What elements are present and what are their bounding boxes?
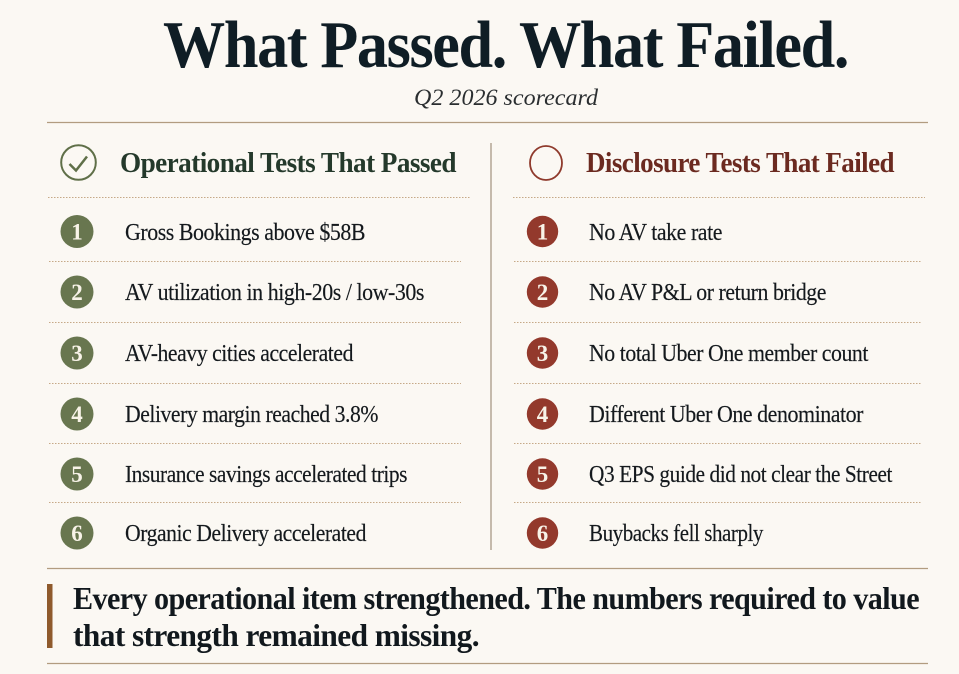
- item 3: No total Uber One member count: [589, 341, 869, 367]
- item 1: No AV take rate: [589, 220, 722, 246]
- callout: that strength remained missing.: [73, 617, 479, 653]
- item 6: 6: [71, 521, 83, 546]
- item 6: Buybacks fell sharply: [589, 521, 763, 547]
- item 1: [527, 216, 722, 247]
- panel: disclosure tests that failed: [513, 146, 925, 549]
- item 1: Gross Bookings above $58B: [125, 220, 365, 246]
- item 2: No AV P&L or return bridge: [589, 280, 826, 306]
- item 2: [527, 276, 826, 308]
- item 6: 6: [537, 521, 548, 546]
- item 5: 5: [537, 462, 548, 487]
- callout: [47, 580, 919, 653]
- item 5: [60, 458, 407, 490]
- subtitle: Q2 2026 scorecard: [414, 85, 599, 110]
- item 3: 3: [71, 341, 83, 366]
- item 2: [60, 276, 424, 308]
- item 2: 2: [537, 280, 548, 305]
- callout text: Every operational item strengthened. The numbers required to value: [73, 580, 919, 616]
- icon: empty circle: [530, 146, 562, 180]
- panel: operational tests that passed: [48, 145, 470, 549]
- item 5: Q3 EPS guide did not clear the Street: [589, 462, 893, 488]
- item 4: [527, 398, 863, 430]
- item 4: Delivery margin reached 3.8%: [125, 402, 378, 428]
- item 6: Organic Delivery accelerated: [125, 521, 366, 547]
- item 1: [60, 215, 365, 248]
- item 4: 4: [537, 402, 549, 427]
- item 3: [527, 337, 869, 369]
- item 6: [60, 516, 366, 550]
- item 1: 1: [537, 220, 548, 244]
- item 3: [60, 336, 353, 370]
- title: What Passed. What Failed.: [163, 8, 848, 82]
- item 1: 1: [71, 220, 83, 244]
- item 2: 2: [71, 280, 83, 305]
- heading: passed: Operational Tests That Passed: [120, 147, 456, 179]
- item 6: [527, 517, 763, 549]
- item 4: [60, 398, 378, 430]
- callout accent bar: [47, 584, 52, 648]
- item 3: 3: [537, 341, 548, 366]
- item 2: AV utilization in high-20s / low-30s: [125, 280, 424, 306]
- heading: failed: Disclosure Tests That Failed: [586, 147, 894, 179]
- item 3: AV-heavy cities accelerated: [125, 341, 353, 367]
- item 4: Different Uber One denominator: [589, 402, 863, 428]
- icon: check circle: [61, 145, 96, 180]
- item 4: 4: [71, 402, 83, 427]
- item 5: [527, 458, 893, 490]
- item 5: 5: [71, 462, 83, 487]
- item 5: Insurance savings accelerated trips: [125, 462, 407, 488]
